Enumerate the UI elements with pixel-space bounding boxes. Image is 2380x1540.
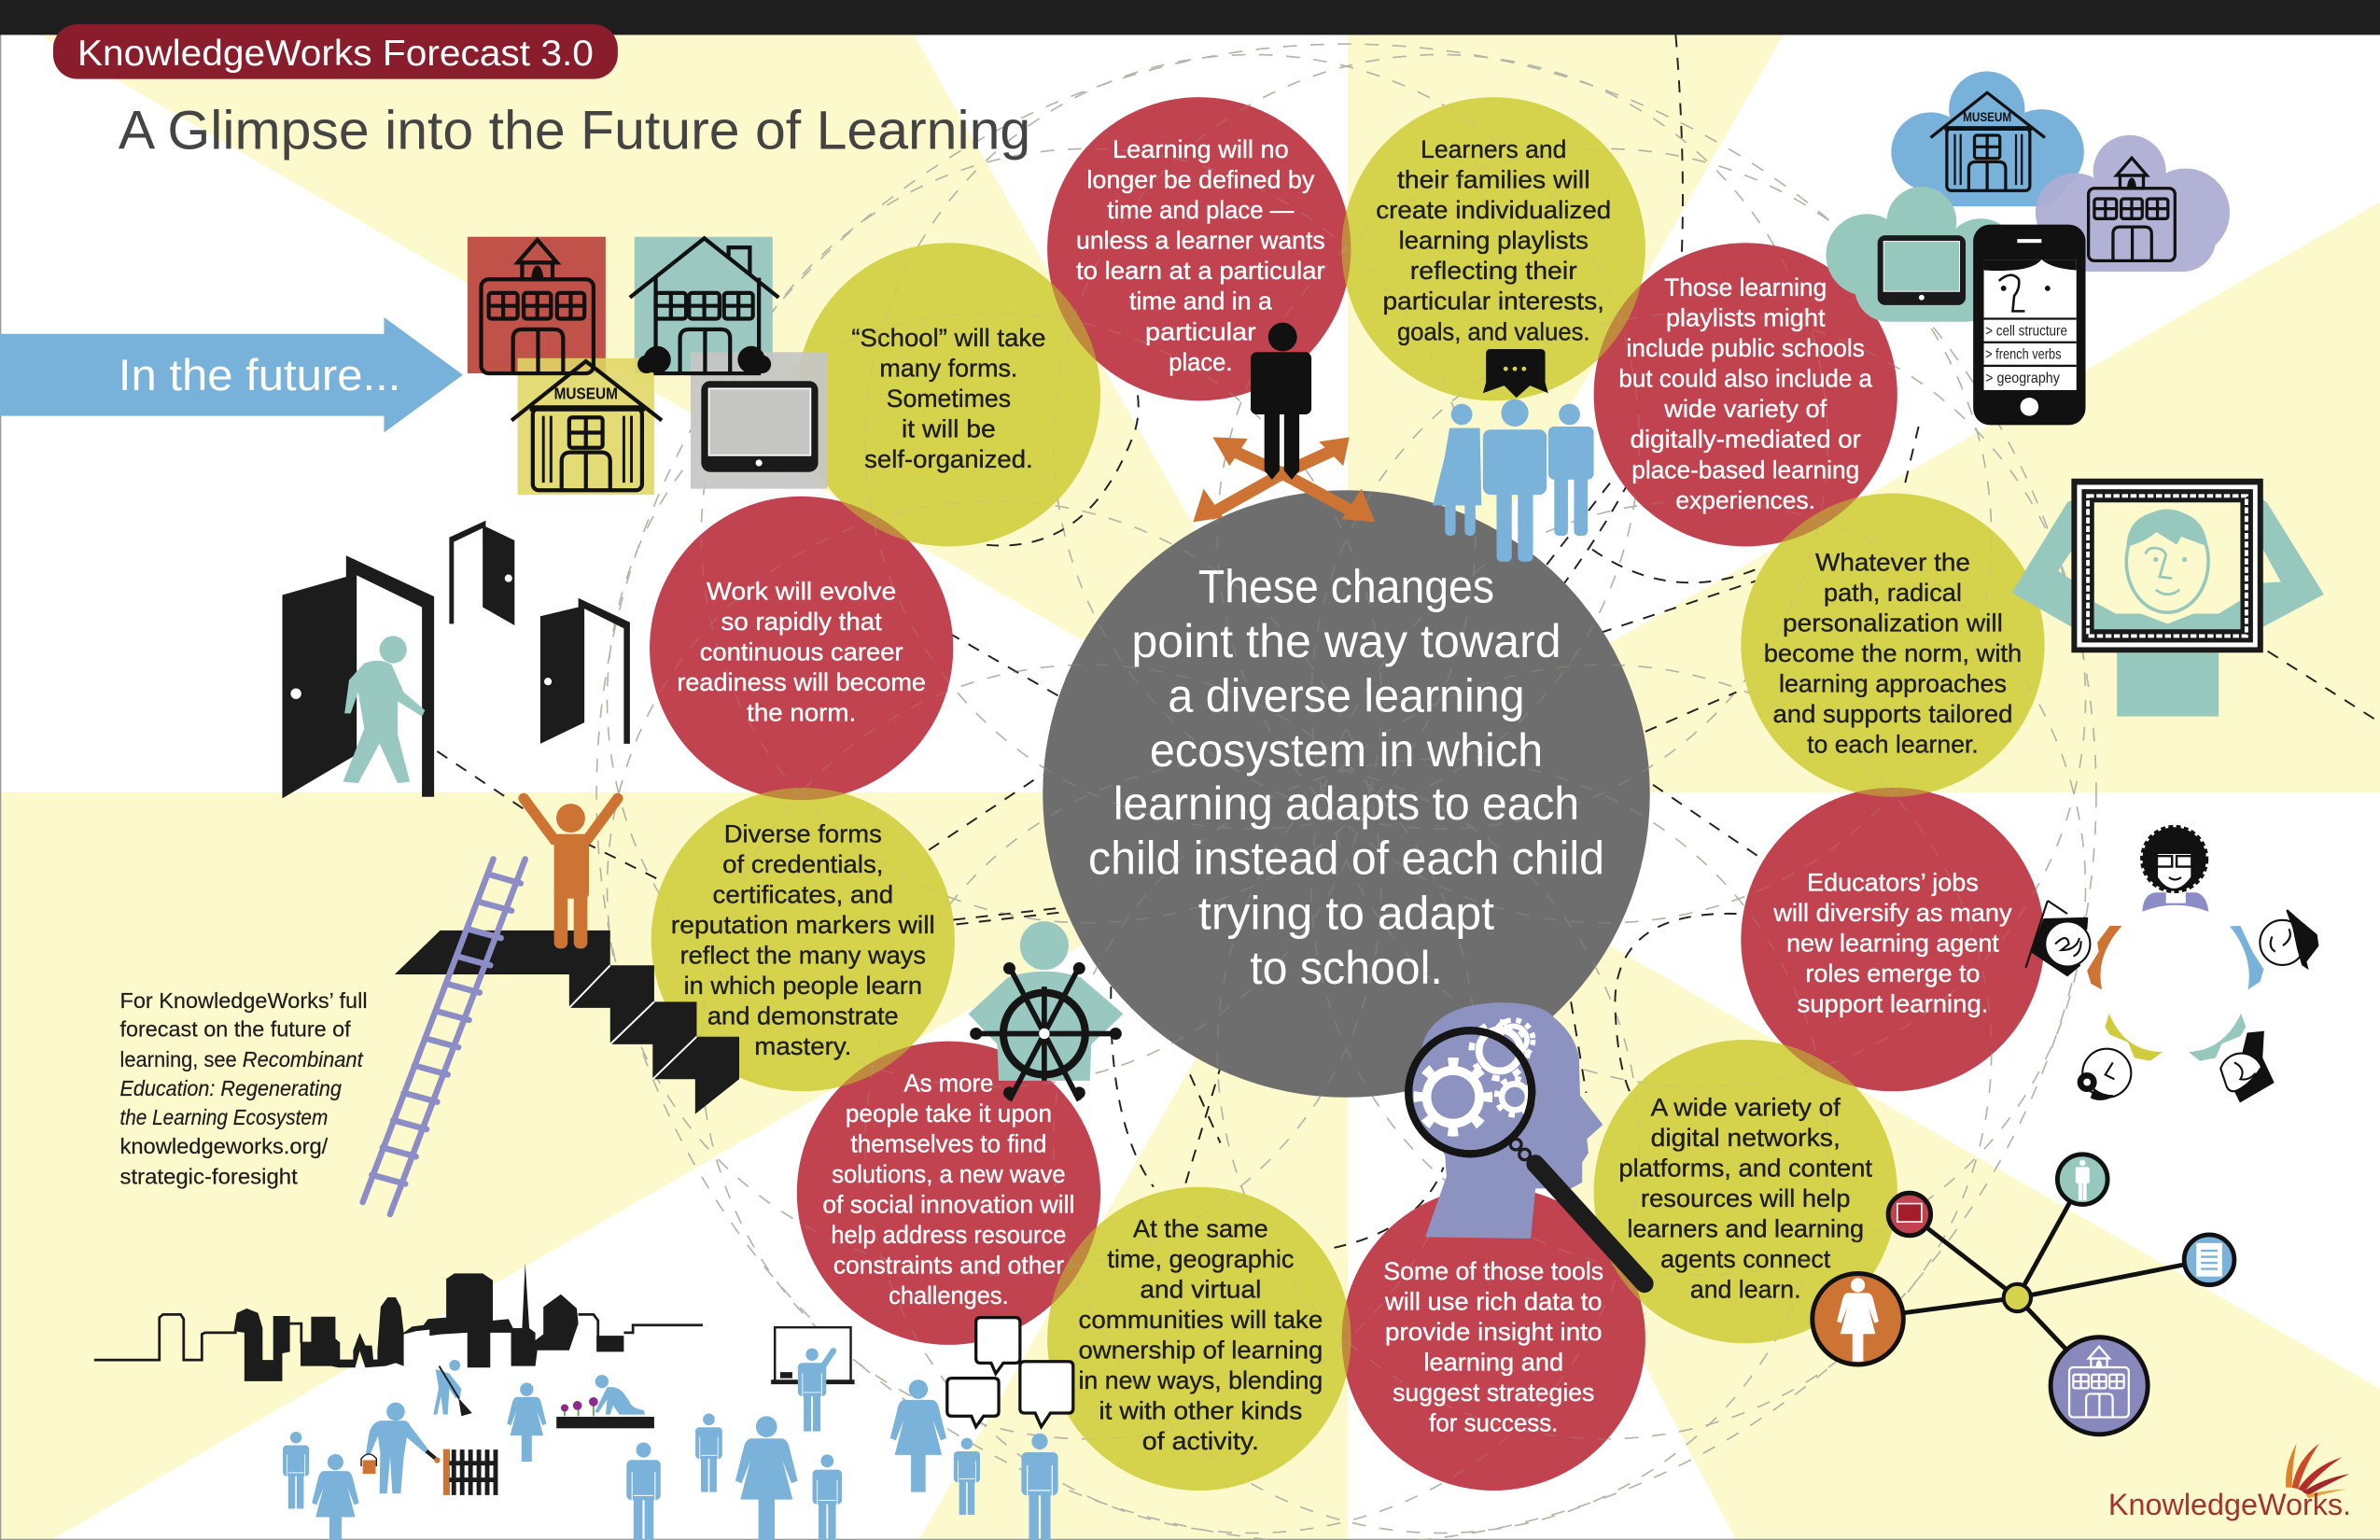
- KnowledgeWorks logo: [2108, 1444, 2351, 1521]
- icon: museum: [511, 361, 662, 490]
- icon: tablet: [701, 381, 819, 472]
- icon: fence: [443, 1449, 497, 1495]
- bubble: social innovation: help address resource: [831, 1221, 1066, 1249]
- bubble: rich data tools: for success.: [1429, 1409, 1558, 1437]
- icon: family with speech bubble: [1433, 349, 1594, 562]
- network diagram: [1813, 1155, 2234, 1435]
- icon: phone with learning list: > cell structure: [1985, 323, 2067, 339]
- icon: educator with curly hair and glasses: [2142, 827, 2206, 891]
- bubble: digital networks: and learn.: [1690, 1275, 1801, 1303]
- bubble: geographic and virtual communities: in new ways, blending: [1078, 1366, 1323, 1394]
- icon: person holding framed portrait: [2011, 479, 2324, 717]
- icon: head with magnifying glass and gears: [1408, 1002, 1645, 1283]
- icon: community people: [283, 1318, 1073, 1540]
- icon: blue cloud: [1891, 71, 2084, 206]
- icon: teal person node: [2057, 1155, 2107, 1204]
- icon: purple cloud: [2036, 135, 2230, 272]
- arrow: In the future: In the future...: [119, 350, 400, 399]
- bubble: learning defined by time and place: time and in a: [1129, 287, 1272, 315]
- bubble: radical personalization: Whatever the: [1815, 548, 1970, 576]
- bubble: geographic and virtual communities: At the same: [1133, 1214, 1268, 1242]
- text: further reading note: the Learning Ecosystem: [119, 1105, 328, 1129]
- bubble: social innovation: themselves to find: [851, 1129, 1046, 1157]
- bubble: learners and families: create individualized: [1376, 196, 1611, 224]
- bubble: learning playlists: digitally-mediated or: [1631, 426, 1861, 454]
- bubble: learning playlists: place-based learning: [1631, 455, 1859, 483]
- icon: person steering ship wheel: [969, 921, 1123, 1100]
- bubble: rich data tools: [1342, 1187, 1645, 1491]
- bubble: learning playlists: include public schools: [1627, 334, 1865, 362]
- tag: KnowledgeWorks Forecast 3.0: [53, 24, 618, 79]
- bubble: educators jobs: new learning agent: [1786, 930, 1999, 958]
- bubble: learners and families: their families will: [1397, 166, 1590, 194]
- icon: educator with graduation cap: [2025, 901, 2090, 975]
- icon: person on stairs: [363, 798, 739, 1214]
- icon: school forms tiles: [468, 237, 827, 495]
- bubble: school will take many forms: self-organized.: [864, 445, 1033, 473]
- bubble: social innovation: As more: [903, 1069, 993, 1097]
- text: further reading note: For KnowledgeWorks’ full: [119, 988, 368, 1013]
- bubble: geographic and virtual communities: ownership of learning: [1078, 1336, 1323, 1364]
- bubble: educators jobs: Educators’ jobs: [1807, 869, 1979, 897]
- bubble: credentials: mastery.: [754, 1032, 851, 1060]
- bubble: learners and families: goals, and values.: [1397, 317, 1590, 345]
- bubble: digital networks: learners and learning: [1627, 1214, 1864, 1242]
- bubble: career readiness: continuous career: [700, 637, 903, 665]
- bubble: learners and families: reflecting their: [1410, 257, 1577, 285]
- icon: educator with dark hair: [2220, 1032, 2273, 1101]
- bubble: learners and families: learning playlists: [1399, 227, 1589, 255]
- bubble: credentials: reflect the many ways: [680, 942, 926, 970]
- bubble: school will take many forms: it will be: [902, 414, 996, 442]
- bubble: rich data tools: Some of those tools: [1383, 1257, 1603, 1285]
- bubble: radical personalization: personalization will: [1783, 609, 2003, 637]
- title: A Glimpse into the Future of Learning: [119, 100, 1030, 161]
- bubble: learning playlists: [1594, 243, 1897, 546]
- bubble: learning playlists: playlists might: [1666, 304, 1826, 332]
- bubble: school will take many forms: “School” will take: [851, 324, 1046, 352]
- bubble: digital networks: [1594, 1040, 1897, 1343]
- bubble: social innovation: challenges.: [889, 1281, 1009, 1309]
- central gray circle: [1043, 490, 1650, 1098]
- bubble: credentials: reputation markers will: [671, 911, 935, 939]
- bubble: learning playlists: wide variety of: [1663, 395, 1827, 423]
- central statement text: a diverse learning: [1168, 669, 1525, 722]
- bubble: career readiness: Work will evolve: [707, 577, 896, 605]
- bubble: digital networks: resources will help: [1641, 1184, 1850, 1212]
- icon: educator with monocle: [2079, 1049, 2131, 1099]
- icon: teacher at whiteboard: [771, 1327, 855, 1432]
- central statement text: to school.: [1250, 941, 1443, 994]
- icon: person gardening: [556, 1375, 654, 1428]
- central statement text: ecosystem in which: [1150, 723, 1543, 777]
- bubble: learners and families: Learners and: [1421, 135, 1566, 163]
- bubble: social innovation: solutions, a new wave: [832, 1160, 1066, 1188]
- bubble: social innovation: [797, 1042, 1100, 1345]
- central statement text: point the way toward: [1131, 614, 1561, 667]
- bubble: learning defined by time and place: particular: [1145, 317, 1256, 345]
- bubble: rich data tools: suggest strategies: [1393, 1379, 1594, 1407]
- bubble: digital networks: agents connect: [1660, 1245, 1831, 1273]
- bubble: school will take many forms: [797, 243, 1100, 546]
- icon: doors with walking person: [282, 521, 630, 798]
- icon: person sweeping: [433, 1360, 472, 1416]
- top black bar: [0, 0, 2380, 35]
- icon: person painting fence: [361, 1403, 441, 1493]
- icon: phone with learning list: > geography: [1985, 371, 2060, 386]
- bubble: social innovation: of social innovation will: [822, 1190, 1074, 1218]
- icon: phone with learning list: > french verbs: [1985, 347, 2062, 363]
- bubble: rich data tools: learning and: [1423, 1349, 1563, 1377]
- bubble: social innovation: people take it upon: [846, 1099, 1052, 1127]
- icon: blue document node: [2184, 1235, 2234, 1285]
- bubble: credentials: [651, 788, 955, 1091]
- central statement text: [1088, 560, 1604, 994]
- icon: orange person node: [1813, 1273, 1903, 1365]
- bubble: career readiness: so rapidly that: [721, 608, 883, 636]
- icon: walking person: [343, 636, 425, 783]
- icon: phone with learning list: [1973, 225, 2086, 425]
- bubble: credentials: of credentials,: [722, 850, 883, 878]
- icon: table and shoulders: [2087, 892, 2263, 1071]
- bubble: learning playlists: experiences.: [1675, 486, 1815, 514]
- bubble: credentials: certificates, and: [713, 881, 893, 909]
- gray dashed orbit pattern: [596, 44, 2096, 1540]
- bubble: radical personalization: and supports tailored: [1772, 700, 2012, 728]
- bubble: educators jobs: support learning.: [1798, 990, 1988, 1018]
- bubble: learning defined by time and place: place.: [1169, 348, 1233, 376]
- icon: ladder: [363, 859, 525, 1214]
- text: further reading note: knowledgeworks.org/: [119, 1134, 329, 1158]
- bubble: educators jobs: [1741, 788, 2045, 1091]
- icon: speech bubbles: [947, 1318, 1073, 1427]
- icon: ring of educators around table: [2025, 827, 2317, 1101]
- icon: clouds with museum, school, tablet and phone: [1826, 71, 2230, 425]
- bubble: radical personalization: learning approaches: [1779, 670, 2007, 698]
- KnowledgeWorks logo: KnowledgeWorks.: [2108, 1488, 2351, 1521]
- bubble: learning defined by time and place: unless a learner wants: [1076, 227, 1325, 255]
- icon: purple school node: [2051, 1337, 2148, 1435]
- bubble: radical personalization: [1741, 494, 2045, 797]
- text: further reading note: Education: Regenerating: [119, 1076, 342, 1100]
- text: further reading note: forecast on the future of: [119, 1017, 351, 1042]
- icon: red monitor node: [1888, 1193, 1931, 1236]
- bubble: credentials: in which people learn: [684, 972, 922, 1000]
- central statement text: learning adapts to each: [1113, 777, 1579, 830]
- bubble: learning playlists: Those learning: [1664, 273, 1827, 301]
- bubble: geographic and virtual communities: [1047, 1187, 1351, 1491]
- icon: educator with cap: [2260, 910, 2317, 968]
- bubble: learning defined by time and place: to learn at a particular: [1076, 257, 1325, 285]
- icon: person at crossroads with arrows: [1193, 323, 1375, 522]
- icon: house: [630, 238, 778, 373]
- bubble: career readiness: the norm.: [747, 698, 856, 726]
- bubble: radical personalization: path, radical: [1824, 579, 1962, 607]
- bubble: radical personalization: to each learner.: [1807, 731, 1979, 759]
- bubble: digital networks: digital networks,: [1651, 1124, 1841, 1152]
- icon: person with raised arms: [524, 798, 618, 948]
- text: further reading note: strategic-foresight: [119, 1164, 298, 1188]
- bubble: radical personalization: become the norm, with: [1764, 639, 2022, 667]
- bubble: educators jobs: roles emerge to: [1805, 959, 1980, 987]
- icon: teal cloud: [1826, 187, 2017, 322]
- icon: network hub: [2004, 1284, 2031, 1311]
- bubble: learning defined by time and place: time and place —: [1107, 196, 1295, 224]
- black dashed connecting lines: [437, 35, 2380, 1248]
- bubble: credentials: Diverse forms: [724, 820, 882, 848]
- bubble: career readiness: [650, 497, 953, 800]
- icon: school building: [482, 240, 594, 373]
- bubble: learning defined by time and place: [1047, 97, 1351, 400]
- arrow: In the future: [0, 317, 463, 432]
- bubble: rich data tools: provide insight into: [1385, 1318, 1603, 1346]
- bubble: geographic and virtual communities: communities will take: [1078, 1306, 1323, 1334]
- text: further reading note: learning, see Recombinant: [119, 1047, 364, 1071]
- bubble: geographic and virtual communities: of activity.: [1142, 1427, 1259, 1455]
- icon: city skyline: [94, 1263, 703, 1381]
- bubble: digital networks: A wide variety of: [1651, 1093, 1841, 1121]
- central statement text: child instead of each child: [1088, 832, 1604, 885]
- bubble: school will take many forms: Sometimes: [887, 385, 1011, 413]
- bubble: geographic and virtual communities: time, geographic: [1107, 1245, 1294, 1273]
- bubble: social innovation: constraints and other: [833, 1251, 1064, 1279]
- bubble: learning playlists: but could also include a: [1618, 365, 1872, 393]
- central statement text: These changes: [1198, 560, 1494, 613]
- text: further reading note: [119, 988, 368, 1188]
- bubble: educators jobs: will diversify as many: [1772, 899, 2012, 927]
- bubble: credentials: and demonstrate: [707, 1002, 899, 1030]
- bubble: learners and families: particular interests,: [1383, 287, 1604, 315]
- bubble: geographic and virtual communities: it with other kinds: [1099, 1397, 1302, 1425]
- tag: KnowledgeWorks Forecast 3.0: KnowledgeWorks Forecast 3.0: [77, 34, 594, 74]
- icon: tablet: [1878, 235, 1966, 305]
- central statement text: trying to adapt: [1198, 886, 1494, 939]
- bubble: rich data tools: will use rich data to: [1384, 1287, 1603, 1315]
- bubble: career readiness: readiness will become: [677, 668, 926, 696]
- bubble: geographic and virtual communities: and virtual: [1140, 1275, 1261, 1303]
- bubble: learning defined by time and place: Learning will no: [1113, 135, 1289, 163]
- bubble: learners and families: [1342, 97, 1645, 400]
- bubble: learning defined by time and place: longer be defined by: [1086, 166, 1315, 194]
- bubble: digital networks: platforms, and content: [1618, 1154, 1873, 1182]
- bubble: school will take many forms: many forms.: [879, 354, 1017, 382]
